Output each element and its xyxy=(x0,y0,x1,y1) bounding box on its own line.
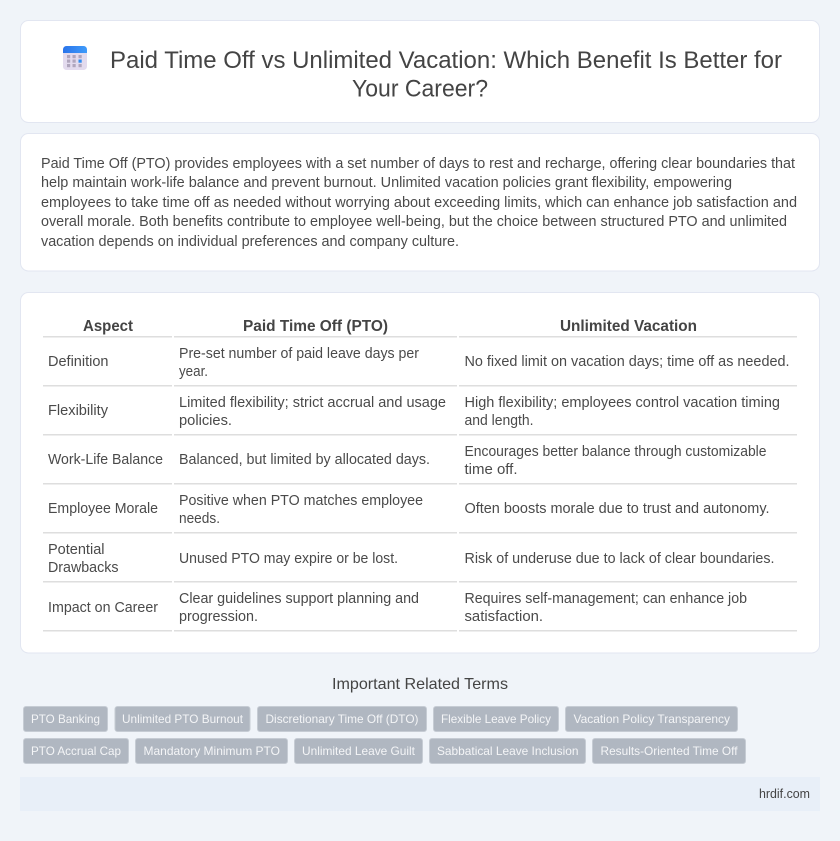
tag xyxy=(434,706,558,732)
text block: intro paragraph: overall morale. Both benefits contribute to employee well-being, but the choice between structured PTO and unlimited xyxy=(41,214,787,230)
tag xyxy=(294,738,422,764)
table header row: Paid Time Off (PTO) xyxy=(243,318,388,335)
table row: Flexibility: Limited flexibility; strict accrual and usage xyxy=(179,395,446,411)
table row: Employee Morale: Positive when PTO matches employee xyxy=(179,493,423,509)
table row: Work-Life Balance: Balanced, but limited by allocated days. xyxy=(179,452,430,468)
heading: important related terms: Important Related Terms xyxy=(332,676,508,693)
tag xyxy=(136,738,288,764)
tag: Mandatory Minimum PTO xyxy=(144,744,280,758)
tag: Unlimited PTO Burnout xyxy=(122,712,244,726)
text block: intro paragraph: Paid Time Off (PTO) provides employees with a set number of days to rest and recharge, offering clear boundaries that xyxy=(41,156,795,172)
tag: Discretionary Time Off (DTO) xyxy=(266,712,418,726)
table row: Definition: No fixed limit on vacation days; time off as needed. xyxy=(464,354,790,370)
text block: intro paragraph: employees to take time off as needed without worrying about exceeding limits, which can enhance job satisfaction and xyxy=(41,195,797,211)
tag xyxy=(430,738,586,764)
tag xyxy=(24,706,108,732)
table row: Flexibility: Flexibility xyxy=(48,403,109,419)
tag xyxy=(115,706,250,732)
table header row xyxy=(43,318,797,338)
table row: Potential Drawbacks: Unused PTO may expire or be lost. xyxy=(179,551,398,567)
table row: Impact on Career xyxy=(43,591,797,632)
table row: Impact on Career: progression. xyxy=(179,609,258,625)
table header row: Unlimited Vacation xyxy=(560,318,697,335)
tag: Vacation Policy Transparency xyxy=(574,712,730,726)
table row: Potential Drawbacks xyxy=(43,542,797,582)
table row: Employee Morale xyxy=(43,493,797,534)
tag: Flexible Leave Policy xyxy=(441,712,551,726)
table row: Work-Life Balance: time off. xyxy=(464,462,518,478)
table row: Flexibility: High flexibility; employees control vacation timing xyxy=(464,395,780,411)
table row: Potential Drawbacks: Risk of underuse due to lack of clear boundaries. xyxy=(464,551,774,567)
table row: Flexibility xyxy=(43,395,797,436)
table row: Employee Morale: Often boosts morale due to trust and autonomy. xyxy=(464,501,770,517)
table row: Impact on Career: Impact on Career xyxy=(48,600,158,616)
text block: intro paragraph: vacation depends on individual preferences and company culture. xyxy=(41,234,459,250)
footer xyxy=(20,777,820,811)
table row: Potential Drawbacks: Potential xyxy=(48,542,104,558)
table row: Work-Life Balance: Encourages better balance through customizable xyxy=(464,444,766,460)
tag: Results-Oriented Time Off xyxy=(600,744,738,758)
table row: Employee Morale: Employee Morale xyxy=(48,501,158,517)
panel: introduction text xyxy=(20,134,820,271)
table row: Definition xyxy=(43,346,797,386)
table row: Flexibility: and length. xyxy=(464,413,534,429)
tag: Sabbatical Leave Inclusion xyxy=(437,744,578,758)
footer: hrdif.com xyxy=(759,787,810,801)
tag xyxy=(258,706,426,732)
tag xyxy=(592,738,746,764)
table row: Potential Drawbacks: Drawbacks xyxy=(48,560,118,576)
tag: PTO Accrual Cap xyxy=(31,744,121,758)
table row: Definition: year. xyxy=(179,364,208,380)
tag list: related terms xyxy=(24,706,746,764)
tag: Unlimited Leave Guilt xyxy=(302,744,416,758)
icon: calendar xyxy=(63,46,87,70)
table row: Work-Life Balance: Work-Life Balance xyxy=(48,452,163,468)
table row: Flexibility: policies. xyxy=(179,413,232,429)
panel: title header xyxy=(20,20,820,122)
table row: Employee Morale: needs. xyxy=(179,511,220,527)
table row: Impact on Career: Clear guidelines support planning and xyxy=(179,591,419,607)
text block: intro paragraph xyxy=(41,156,797,250)
panel: comparison table xyxy=(20,292,820,653)
tag: PTO Banking xyxy=(31,712,100,726)
title: Paid Time Off vs Unlimited Vacation: Which Benefit Is Better for xyxy=(110,47,782,74)
text block: intro paragraph: help maintain work-life balance and prevent burnout. Unlimited vacation policies grant flexibility, empowering xyxy=(41,175,732,191)
title xyxy=(110,47,782,102)
table header row: Aspect xyxy=(83,318,134,335)
table row: Definition: Pre-set number of paid leave days per xyxy=(179,346,419,362)
table row: Definition: Definition xyxy=(48,354,108,370)
title: Your Career? xyxy=(352,76,488,102)
table row: Impact on Career: satisfaction. xyxy=(464,609,543,625)
tag xyxy=(24,738,128,764)
table row: Work-Life Balance xyxy=(43,444,797,484)
tag xyxy=(566,706,738,732)
table row: Impact on Career: Requires self-management; can enhance job xyxy=(464,591,747,607)
